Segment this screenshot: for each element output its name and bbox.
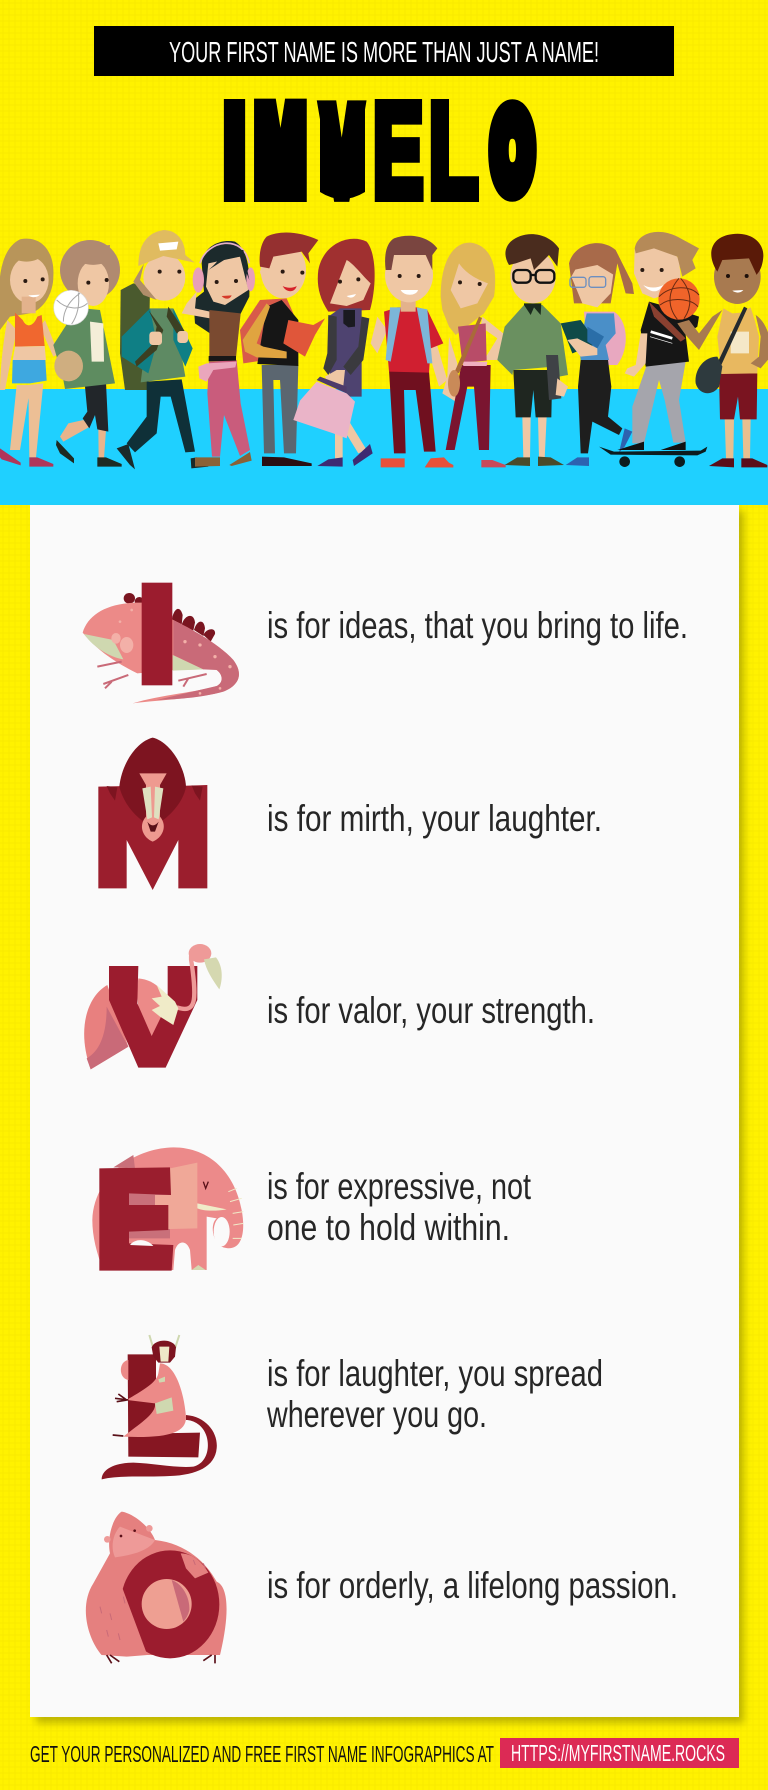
text: E lines: is for expressive, not: [267, 1166, 532, 1207]
person 6: girl in purple vest with pink suitcase: [293, 239, 375, 467]
text: M line: is for mirth, your laughter.: [267, 798, 602, 839]
people left half: [0, 230, 375, 469]
person 7: boy in red shirt: [371, 236, 453, 467]
text: L lines: is for laughter, you spread: [267, 1353, 603, 1394]
blue floor band: [0, 389, 768, 505]
illustration: group of twelve young people: [0, 230, 768, 469]
row L: lemur and text: [102, 1335, 603, 1479]
people right half: [371, 232, 768, 467]
person 3: hiker with cap and backpack: [117, 230, 208, 469]
title: name: E: [373, 76, 424, 226]
person 5: boy with red hair, jeans and book: [240, 233, 325, 466]
icon: gorilla letter O: [86, 1512, 227, 1663]
white card panel: [30, 505, 739, 1717]
person 2: girl in green jacket with volleyball: [53, 240, 122, 467]
title: name: I: [216, 70, 253, 232]
text: V line: is for valor, your strength.: [267, 990, 595, 1031]
row O: gorilla and text: [86, 1512, 678, 1663]
header banner: [94, 26, 674, 76]
person 12: boy in yellow tank top with shoulder bag: [677, 234, 768, 467]
title: name: O: [493, 91, 532, 210]
title: name: M: [256, 88, 305, 215]
person 1: girl in orange top: [0, 239, 80, 467]
row V: flamingo and text: [84, 944, 595, 1069]
icon: lizard letter I: [83, 583, 239, 703]
text: L lines: wherever you go.: [266, 1394, 487, 1435]
icon: lemur letter L: [102, 1335, 217, 1479]
person 9: boy with glasses in green sweater: [497, 234, 568, 466]
title: name: L: [429, 77, 478, 226]
person 8: blonde girl with maroon trousers: [426, 243, 507, 467]
card shadow: [36, 511, 744, 1723]
title: name: V: [324, 88, 359, 215]
text: E lines: [267, 1166, 532, 1248]
row E: elephant and text: [92, 1147, 532, 1271]
icon: elephant letter E: [92, 1147, 243, 1271]
title: name: [216, 70, 532, 232]
person 10: girl with glasses reading tablet: [561, 243, 634, 466]
text: L lines: [266, 1353, 603, 1435]
person 4: girl in brown top with headphones: [182, 241, 255, 467]
text: E lines: one to hold within.: [267, 1207, 510, 1248]
person 11: skater in black t-shirt with basketball: [599, 232, 707, 467]
icon: flamingo letter V: [84, 944, 222, 1069]
row I: lizard and text: [83, 583, 688, 703]
row M: baboon and text: [98, 738, 602, 890]
icon: baboon letter M: [98, 738, 207, 890]
